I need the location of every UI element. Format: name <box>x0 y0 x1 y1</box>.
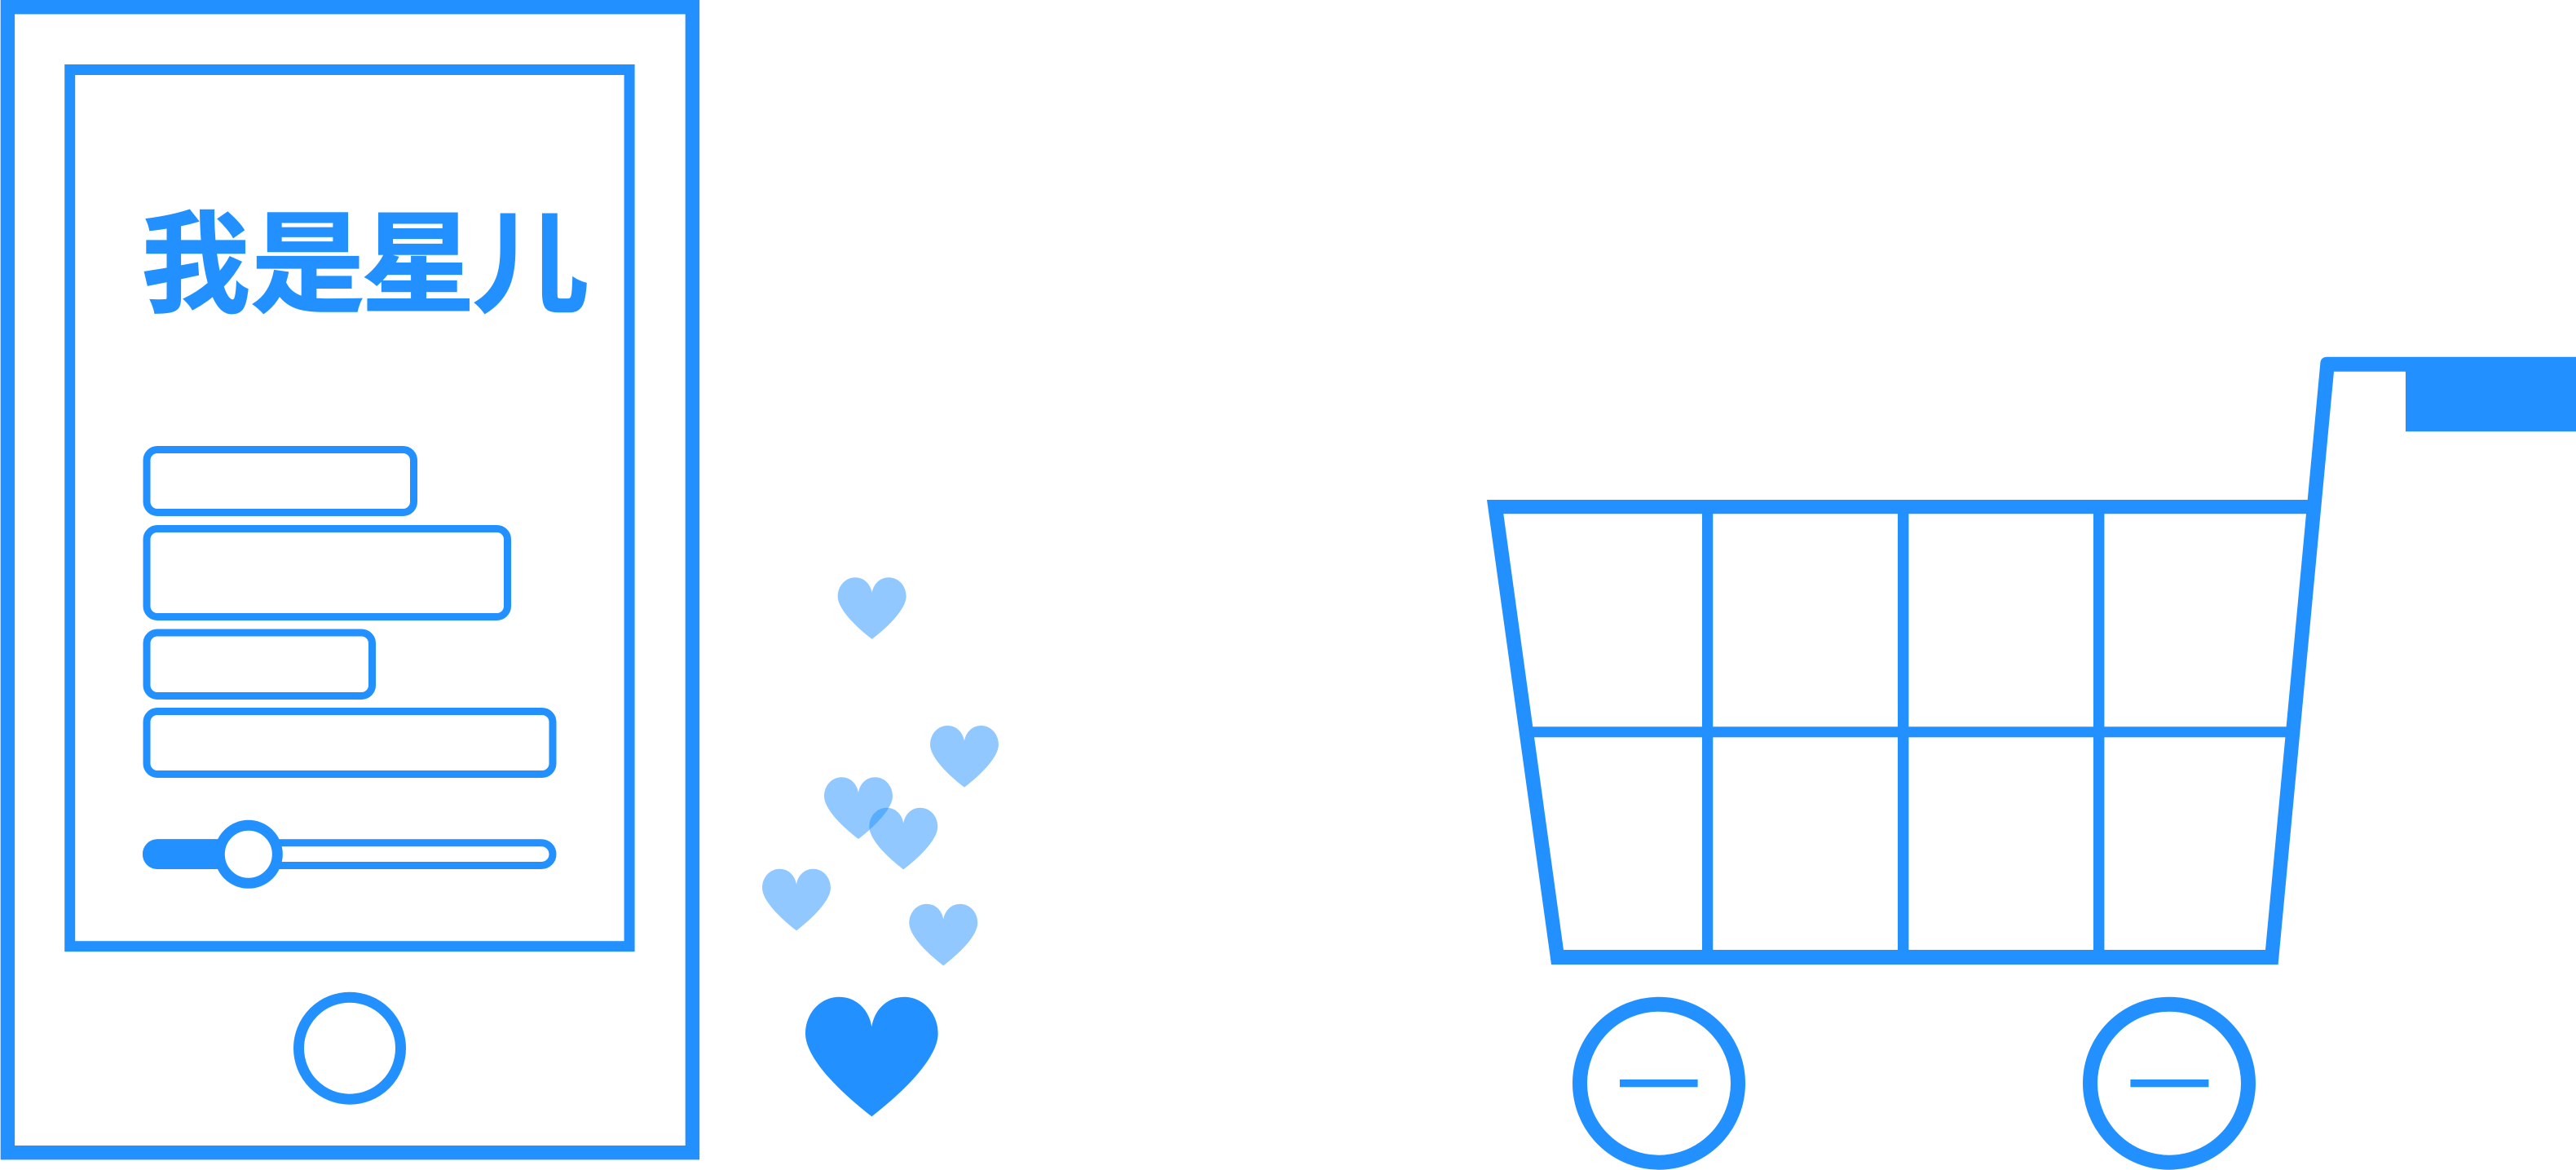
phone body <box>7 7 692 1153</box>
heart: lower left <box>762 869 831 930</box>
form field 4 <box>147 711 553 775</box>
heart: lower right <box>909 904 977 965</box>
title: 星 <box>361 204 475 328</box>
slider track <box>147 843 553 866</box>
panel: shopping cart <box>1487 357 2576 1163</box>
panel: phone <box>7 7 692 1153</box>
slider knob <box>219 825 277 883</box>
title: 我 <box>141 203 250 327</box>
home button <box>298 997 401 1099</box>
slider filled portion <box>143 839 245 869</box>
slider <box>143 825 553 883</box>
left wheel <box>1580 1004 1738 1163</box>
phone screen <box>70 70 629 947</box>
heart: middle right <box>869 808 937 869</box>
form field 1 <box>147 450 414 512</box>
right wheel <box>2090 1004 2248 1163</box>
form field 2 <box>147 528 507 616</box>
title: 是 <box>250 204 365 328</box>
form field 3 <box>147 633 372 696</box>
cart basket frame and handle <box>1487 357 2576 965</box>
hearts <box>762 577 999 1116</box>
heart: top <box>838 577 906 639</box>
heart: upper right <box>930 726 999 788</box>
cart grid <box>1528 510 2291 954</box>
title <box>141 203 589 328</box>
heart: middle left <box>824 777 893 839</box>
title: 儿 <box>473 203 589 327</box>
heart: large solid <box>805 997 938 1116</box>
